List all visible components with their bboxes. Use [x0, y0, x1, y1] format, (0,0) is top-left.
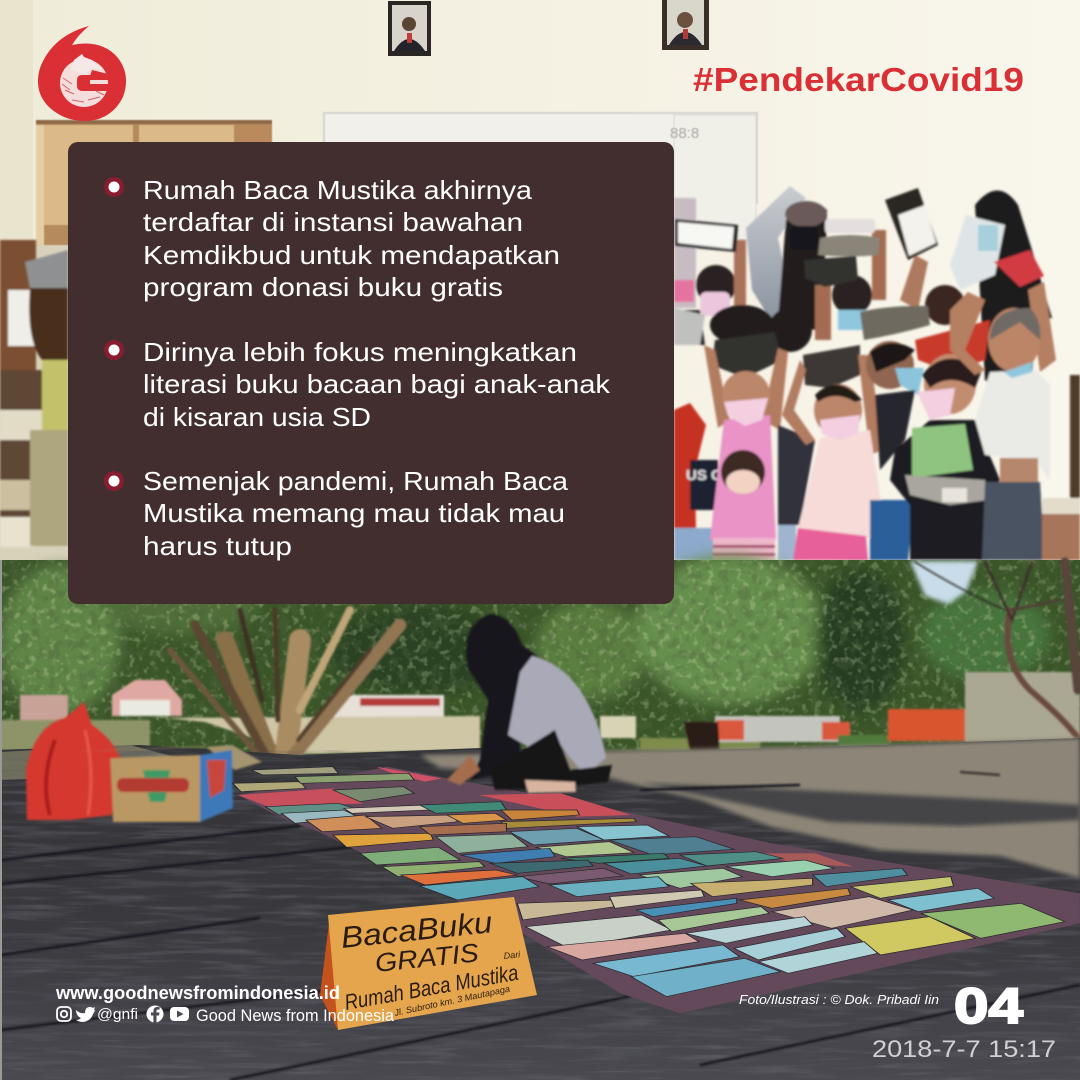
bullet point 3: [104, 466, 569, 561]
bullet point 2: [104, 337, 611, 432]
woman in grey with raised arm: [746, 186, 827, 330]
footer: website and social handles: @gnfi: [97, 1007, 138, 1023]
text block 3: Semenjak pandemi, Rumah Baca: [143, 466, 569, 496]
cardboard box at right: [1042, 375, 1080, 560]
icon: facebook: [146, 1006, 164, 1023]
boy behind in blue mask: [866, 341, 924, 560]
text block 2: literasi buku bacaan bagi anak-anak: [143, 369, 611, 399]
sign lettering: Rumah Baca Mustika: [343, 960, 520, 1015]
footer: website and social handles: [55, 983, 395, 1025]
left child in red: US G: [686, 467, 723, 484]
cardboard sign: [320, 897, 537, 1030]
woman kneeling: [447, 614, 612, 793]
wardrobe: [36, 120, 272, 245]
portrait: left frame: [388, 1, 431, 56]
portrait: right frame: [662, 0, 709, 50]
bare branches at right: [915, 562, 1078, 738]
sign lettering: Dari: [503, 949, 522, 961]
tree trunk at centre left: [170, 610, 400, 762]
photo date stamp: 2018-7-7 15:17: [872, 1036, 1056, 1063]
boy in white shirt with raised arm: [950, 282, 1056, 560]
bullet point 1: [104, 175, 560, 302]
text block 1: [143, 175, 560, 302]
icon: youtube: [170, 1007, 189, 1021]
text block 1: terdaftar di instansi bawahan: [143, 207, 523, 237]
text block 2: Dirinya lebih fokus meningkatkan: [143, 337, 577, 367]
footer: website and social handles: Good News from Indonesia: [196, 1007, 395, 1025]
text block 2: [143, 337, 611, 432]
text block 1: program donasi buku gratis: [143, 272, 503, 302]
text block 2: di kisaran usia SD: [143, 402, 371, 432]
text block 3: Mustika memang mau tidak mau: [143, 498, 565, 528]
red plastic bag: [26, 702, 126, 820]
sign lettering: GRATIS: [373, 937, 481, 978]
logo: Good News from Indonesia: [38, 26, 126, 121]
text block 3: harus tutup: [143, 531, 292, 561]
sign lettering: [339, 906, 522, 1018]
girl in pink dress: [704, 345, 788, 560]
tablet: [675, 219, 738, 252]
hashtag heading: #PendekarCovid19: [693, 61, 1024, 98]
sign lettering: BacaBuku: [339, 906, 494, 955]
sky: [910, 561, 978, 604]
woman in black hijab: [975, 190, 1052, 420]
cardboard box: [64, 745, 262, 822]
panel: text points: [68, 142, 674, 604]
wrapped book packages: [674, 219, 930, 388]
child in green jersey: [890, 354, 1000, 560]
text block 1: Rumah Baca Mustika akhirnya: [143, 175, 533, 205]
laid out books: [233, 767, 1065, 997]
page number: 04: [954, 978, 1023, 1034]
photo credit: Foto/Ilustrasi : © Dok. Pribadi Iin: [739, 993, 939, 1007]
red card: [994, 250, 1044, 287]
photo: children holding donated books in classroom: [0, 0, 1080, 561]
wooden deck: [0, 738, 1080, 1080]
text block 1: Kemdikbud untuk mendapatkan: [143, 240, 560, 270]
person and shelves at left edge: [0, 240, 68, 547]
whiteboard: 88:8: [670, 125, 699, 142]
girl in white top and pink skirt: [782, 355, 883, 560]
footer: website and social handles: www.goodnewsfromindonesia.id: [55, 983, 340, 1003]
text block 3: [143, 466, 569, 561]
group of children: [674, 186, 1080, 560]
sign lettering: Jl. Subroto km. 3 Mautapaga: [392, 984, 511, 1018]
dark shirt child behind: [778, 425, 815, 560]
whiteboard: [324, 113, 757, 240]
back row of children: [674, 198, 990, 372]
background buildings, wall and truck: [0, 672, 1080, 754]
icon: instagram: [57, 1007, 71, 1021]
foliage background: [0, 555, 1080, 760]
left child in red: [674, 403, 723, 560]
icon: twitter: [76, 1007, 95, 1022]
book mat: [238, 767, 1080, 1013]
photo: woman arranging free books outdoors: [0, 555, 1080, 1080]
plastic bag: [950, 215, 1005, 290]
book box held high: [885, 188, 938, 260]
